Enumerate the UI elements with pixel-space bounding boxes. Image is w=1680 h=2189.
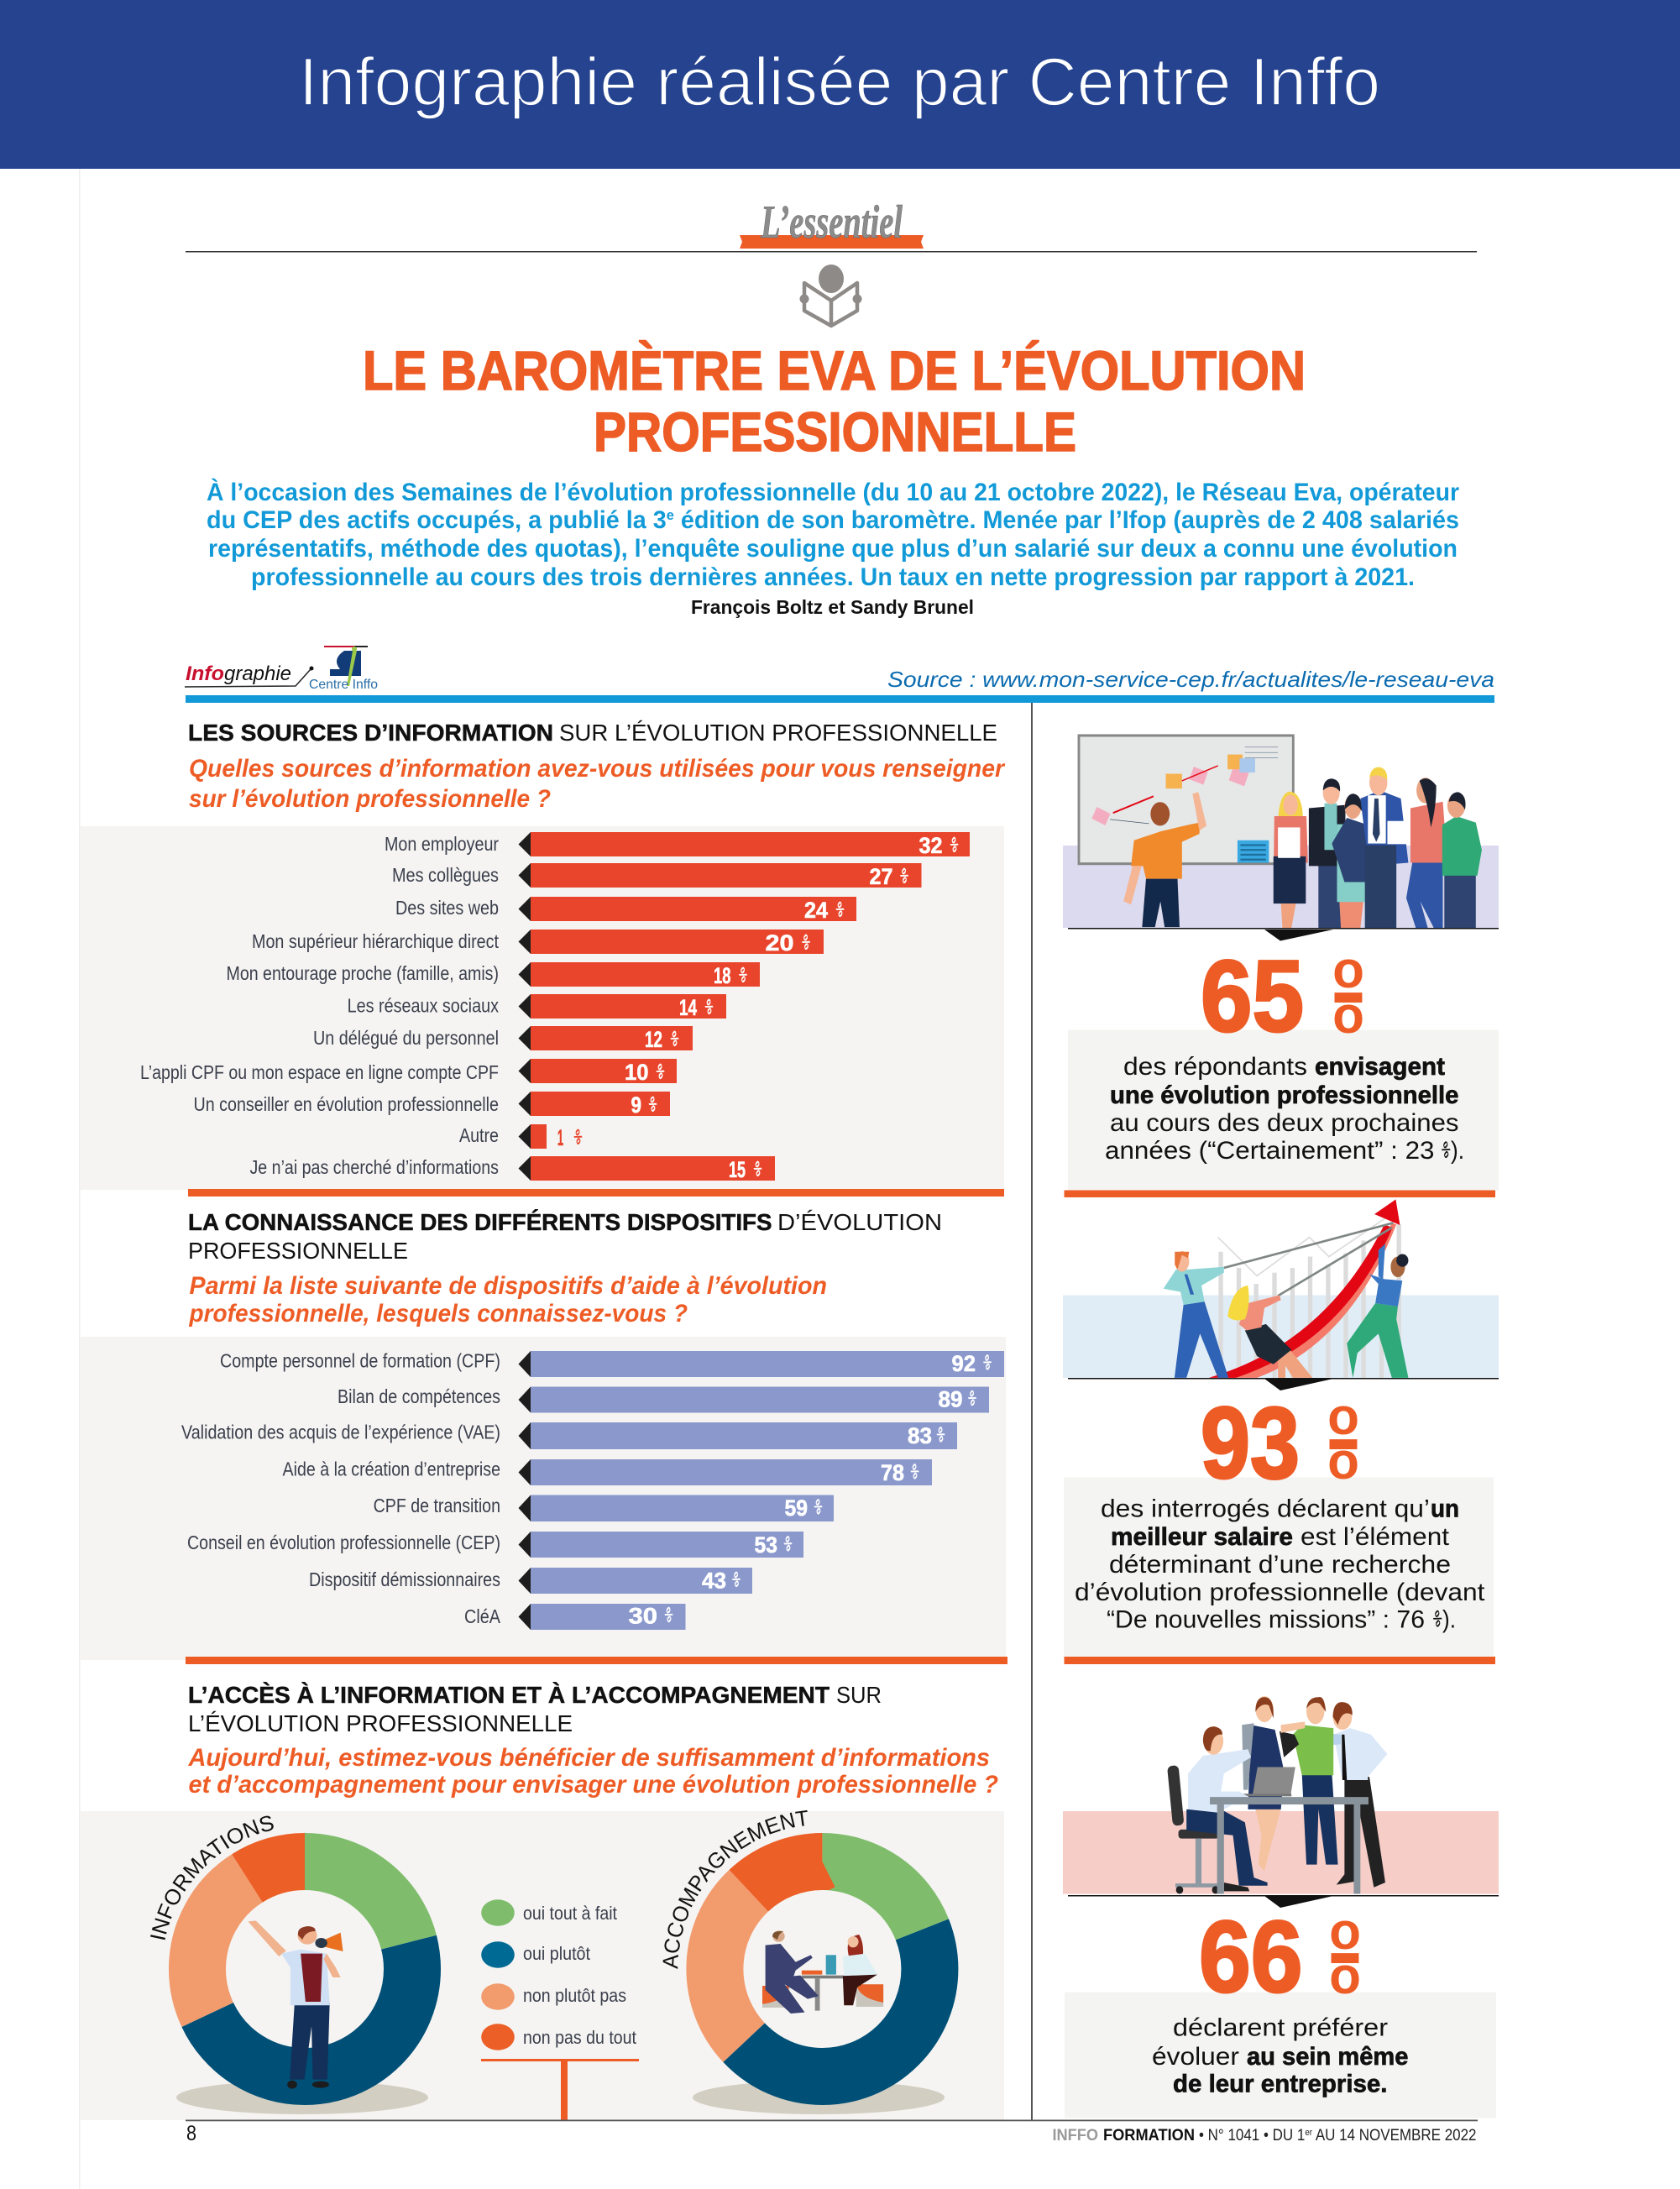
big number: 93%: – [1328, 1380, 1358, 1493]
bar: CEP: 53 [754, 1532, 777, 1558]
heading: accès: L’ÉVOLUTION PROFESSIONNELLE [188, 1710, 573, 1736]
heading: accès: SUR [836, 1682, 882, 1708]
heading: dispositifs: D’ÉVOLUTION [777, 1209, 942, 1235]
legend item: oui plutôt [481, 1941, 590, 1968]
question: dispositifs: Parmi la liste suivante de dispositifs d’aide à l’évolution [190, 1272, 827, 1300]
bar: Mon supérieur hiérarchique direct: Mon supérieur hiérarchique direct [252, 930, 500, 952]
footer: • N° 1041 • DU 1 [1199, 2127, 1317, 2144]
bar: Un délégué du personnel: Un délégué du personnel [313, 1027, 499, 1049]
illustration: team high five at a desk [1167, 1696, 1387, 1893]
intro text: e [667, 507, 674, 523]
question: accès: Aujourd’hui, estimez-vous bénéficier de suffisamment d’informations [188, 1744, 990, 1772]
stat text: 66%: évoluer [1152, 2043, 1239, 2071]
stat text: 65%: des répondants [1123, 1053, 1307, 1081]
bar: Dispositif démissionnaires: Dispositif démissionnaires [309, 1568, 500, 1590]
heading: sources: SUR L’ÉVOLUTION PROFESSIONNELLE [559, 720, 997, 746]
authors: François Boltz et Sandy Brunel [691, 596, 974, 618]
bar chart: sources [140, 832, 970, 1182]
footer: AU 14 NOVEMBRE 2022 [1312, 2127, 1476, 2144]
bar: CPF de transition [374, 1495, 834, 1521]
bar: Mes collègues: % [898, 866, 910, 887]
legend item: oui plutôt: oui plutôt [523, 1943, 590, 1964]
bar: CléA: 30 [628, 1604, 657, 1629]
bar: Aide à la création: % [908, 1461, 921, 1483]
stat panel: 65% [1063, 736, 1499, 1197]
bar: Mon employeur [385, 832, 970, 858]
bar: Mon employeur: 32 [919, 833, 942, 858]
heading: dispositifs: LA CONNAISSANCE DES DIFFÉRENTS DISPOSITIFS [188, 1209, 772, 1235]
bar: Un conseiller: % [646, 1094, 659, 1115]
intro text [207, 478, 1459, 591]
source: Source : www.mon-service-cep.fr/actualites/le-reseau-eva [887, 667, 1494, 692]
pointer [1264, 1379, 1333, 1390]
bar: Mes collègues: 27 [870, 864, 893, 889]
bar: Bilan de compétences: 89 [939, 1387, 962, 1412]
bar: Un délégué du personnel: % [667, 1029, 681, 1050]
big number: 65% [1201, 934, 1364, 1053]
footer: FORMATION [1103, 2127, 1195, 2144]
bar: Aide à la création: 78 [881, 1460, 904, 1485]
question: dispositifs [189, 1272, 827, 1328]
bar: Les réseaux sociaux [348, 994, 726, 1020]
stat text: 93%: déterminant d’une recherche [1109, 1551, 1451, 1579]
panel: sources d'information [80, 720, 1006, 1197]
stat text: 65%: % [1438, 1138, 1453, 1162]
illustration: team at a board [1079, 736, 1482, 928]
bar: CléA [464, 1604, 685, 1630]
big number: 93% [1201, 1380, 1359, 1500]
bar: CPF: 92 [952, 1351, 976, 1376]
bar: Mes collègues: Mes collègues [392, 864, 499, 886]
bar: Je n'ai pas cherché: % [751, 1159, 764, 1180]
question: accès: et d’accompagnement pour envisager une évolution professionnelle ? [188, 1771, 998, 1799]
stat text: 93%: % [1430, 1607, 1445, 1631]
bar: CPF de transition: % [811, 1496, 824, 1518]
footer: 8 [186, 2122, 196, 2145]
man 6 [1444, 874, 1476, 928]
bar: L'appli CPF: % [653, 1061, 667, 1082]
panel: connaissance des dispositifs [80, 1209, 1007, 1664]
heading: accès [188, 1682, 882, 1736]
bar chart: dispositifs [181, 1350, 1004, 1630]
illustration: two people at a table [762, 1930, 883, 2014]
bar: CEP: Conseil en évolution professionnelle (CEP) [187, 1532, 500, 1553]
heading: accès: L’ACCÈS À L’INFORMATION ET À L’ACCOMPAGNEMENT [188, 1682, 830, 1708]
intro text: édition de son baromètre. Menée par l’Ifop (auprès de 2 408 salariés [674, 506, 1459, 534]
section tag: L'essentiel: L’essentiel [760, 196, 903, 249]
stat text: 93%: un [1431, 1495, 1459, 1523]
intro text: À l’occasion des Semaines de l’évolution professionnelle (du 10 au 21 octobre 2022), le Réseau Eva, opérateur [207, 478, 1459, 506]
bar: VAE [181, 1421, 957, 1449]
bar: Mon supérieur hiérarchique direct: % [799, 932, 812, 953]
donut chart: accompagnement: ACCOMPAGNEMENT [663, 1810, 808, 1969]
big number: 66%: – [1330, 1894, 1360, 2007]
bar: Autre: % [571, 1127, 584, 1148]
legend item: oui tout à fait [481, 1899, 617, 1926]
title [363, 339, 1306, 463]
bar: Je n'ai pas cherché: Je n’ai pas cherché d’informations [250, 1156, 499, 1178]
bar: Dispositif démissionnaires: 43 [702, 1568, 726, 1594]
bar: CPF de transition: 59 [784, 1495, 808, 1521]
stat text: 66%: au sein même [1247, 2043, 1409, 2071]
stat panel: 66% [1063, 1696, 1499, 2118]
bar: Bilan de compétences: Bilan de compétences [338, 1385, 500, 1407]
heading: sources [188, 720, 997, 746]
bar: CPF [220, 1350, 1004, 1377]
footer [186, 2119, 1478, 2145]
intro text: professionnelle au cours des trois dernières années. Un taux en nette progression par rapport à 2021. [251, 563, 1415, 591]
bar: Les réseaux sociaux: 14 [679, 995, 697, 1020]
bar: Mon supérieur hiérarchique direct: 20 [766, 930, 794, 956]
top banner [0, 0, 1680, 169]
donut chart: accompagnement [663, 1810, 959, 2114]
bar: Aide à la création [282, 1458, 932, 1485]
heading: dispositifs [188, 1209, 942, 1264]
stat panel: 93% [1063, 1199, 1499, 1664]
bar: Des sites web [395, 897, 856, 923]
bar: Mon entourage proche: Mon entourage proche (famille, amis) [227, 962, 499, 984]
bar: Des sites web: 24 [804, 898, 828, 923]
stat text: 93% [1075, 1495, 1485, 1634]
bar: VAE: % [934, 1424, 947, 1446]
title: PROFESSIONNELLE [594, 401, 1076, 463]
stat text: 93%: ). [1442, 1606, 1456, 1634]
intro text: du CEP des actifs occupés, a publié la 3 [207, 506, 686, 534]
stat text: 93%: des interrogés déclarent qu’ [1101, 1495, 1430, 1523]
stat text: 65%: ). [1451, 1137, 1464, 1165]
bar: Mon entourage proche: 18 [714, 963, 730, 988]
bar: CléA: CléA [464, 1605, 501, 1627]
bar: Autre [459, 1124, 584, 1150]
big number: 93%: o [1327, 1388, 1359, 1446]
footer: INFFO [1053, 2127, 1098, 2144]
logo: Infographie Centre Inffo: Centre Inffo [309, 678, 378, 692]
stat text: 65%: envisagent [1315, 1053, 1445, 1081]
logo: Infographie Centre Inffo [185, 646, 378, 692]
bar: Un délégué du personnel [313, 1026, 693, 1052]
legend item: oui tout à fait: oui tout à fait [523, 1903, 617, 1924]
bar: CPF: Compte personnel de formation (CPF) [220, 1350, 500, 1372]
pointer [1264, 930, 1333, 940]
legend item: non pas du tout [481, 2024, 636, 2050]
woman 3 [1339, 901, 1363, 928]
question: dispositifs: professionnelle, lesquels connaissez-vous ? [189, 1300, 688, 1328]
bar: Mon employeur: % [947, 835, 960, 856]
bar: CPF: % [981, 1352, 993, 1374]
heading: dispositifs: PROFESSIONNELLE [188, 1238, 408, 1264]
bar: CléA: % [662, 1605, 675, 1626]
bar: Un conseiller [193, 1092, 670, 1118]
logo: Infographie Centre Inffo: Info [186, 662, 224, 685]
bar: Des sites web: Des sites web [395, 897, 499, 919]
bar: Mes collègues [392, 863, 922, 889]
bar: L'appli CPF [140, 1059, 677, 1085]
section tag: L'essentiel [186, 196, 1477, 252]
illustration: pulling the rising arrow [1164, 1199, 1408, 1378]
stat text: 66%: de leur entreprise. [1173, 2071, 1387, 2098]
stat text: 66% [1152, 2014, 1409, 2098]
stat text: 93%: meilleur salaire [1111, 1523, 1293, 1551]
question: accès [188, 1744, 998, 1799]
bar: CPF de transition: CPF de transition [374, 1495, 500, 1516]
logo: Infographie Centre Inffo: graphie [224, 662, 291, 685]
bar: Je n'ai pas cherché: 15 [729, 1157, 746, 1182]
bar: L'appli CPF: L’appli CPF ou mon espace en ligne compte CPF [140, 1061, 499, 1083]
legend [481, 1899, 639, 2120]
title: LE BAROMÈTRE EVA DE L’ÉVOLUTION [363, 339, 1306, 401]
bar: Autre: 1 [557, 1125, 563, 1150]
bar: Des sites web: % [833, 899, 846, 920]
bar: Les réseaux sociaux: % [702, 997, 715, 1018]
big number: 66%: 66 [1199, 1899, 1303, 2014]
bar: CEP [187, 1532, 803, 1558]
stat text: 93%: “De nouvelles missions” : 76 [1107, 1606, 1425, 1634]
bar: Mon supérieur hiérarchique direct [252, 930, 824, 956]
bar: Mon entourage proche [227, 962, 760, 988]
stat text: 93%: d’évolution professionnelle (devant [1075, 1579, 1485, 1606]
bar: Mon employeur: Mon employeur [385, 833, 499, 855]
big number: 66% [1199, 1894, 1361, 2014]
bar: Autre: Autre [459, 1124, 499, 1146]
icon: reader with open book [799, 264, 861, 326]
big number: 66%: o [1329, 1947, 1361, 2005]
stat text: 93%: est l’élément [1301, 1523, 1450, 1551]
stat text: 65%: au cours des deux prochaines [1110, 1109, 1459, 1137]
intro text: représentatifs, méthode des quotas), l’enquête souligne que plus d’un salarié sur deux a connu une évolution [208, 535, 1458, 563]
illustration: man with megaphone [248, 1920, 343, 2089]
legend item: non plutôt pas: non plutôt pas [523, 1985, 626, 2006]
bar: Bilan de compétences: % [966, 1388, 978, 1410]
bar: Un délégué du personnel: 12 [645, 1027, 662, 1052]
big number: 93%: 93 [1201, 1385, 1300, 1500]
bar: CEP: % [781, 1533, 794, 1555]
question: sources [189, 755, 1006, 813]
stat text: 65%: années (“Certainement” : 23 [1105, 1137, 1434, 1165]
bar: Bilan de compétences [338, 1385, 989, 1412]
legend item: non plutôt pas [481, 1983, 626, 2010]
question: sources: Quelles sources d’information avez-vous utilisées pour vous renseigner [189, 755, 1006, 783]
big number: 93%: o [1327, 1432, 1359, 1490]
bar: VAE: 83 [908, 1423, 932, 1448]
stat text: 65%: une évolution professionnelle [1110, 1081, 1459, 1109]
top banner: Infographie réalisée par Centre Inffo [299, 45, 1380, 120]
legend item: non pas du tout: non pas du tout [523, 2027, 636, 2048]
bar: Un conseiller: 9 [631, 1092, 641, 1118]
blue rule [186, 695, 1494, 703]
big number: 65%: – [1333, 934, 1363, 1046]
man 4 [1360, 790, 1408, 864]
donut chart: informations: INFORMATIONS [150, 1815, 274, 1940]
question: sources: sur l’évolution professionnelle ? [189, 785, 551, 813]
bar: Dispositif démissionnaires: % [730, 1569, 742, 1590]
bar: Je n'ai pas cherché [250, 1156, 775, 1182]
bar: VAE: Validation des acquis de l’expérience (VAE) [181, 1421, 500, 1443]
woman 5 [1406, 860, 1443, 928]
pointer [1264, 1896, 1333, 1908]
heading: sources: LES SOURCES D’INFORMATION [188, 720, 553, 746]
stat text: 66%: déclarent préférer [1173, 2014, 1388, 2042]
man 2 [1318, 853, 1341, 928]
bar: Aide à la création: Aide à la création d’entreprise [282, 1458, 500, 1479]
woman 1 [1278, 792, 1303, 837]
bar: Les réseaux sociaux: Les réseaux sociaux [348, 994, 499, 1016]
big number: 66%: o [1329, 1903, 1361, 1961]
bar: Un conseiller: Un conseiller en évolution professionnelle [193, 1093, 499, 1115]
bar: Mon entourage proche: % [736, 965, 749, 986]
panel: accès à l'information [81, 1682, 1004, 2120]
stat text: 65% [1105, 1053, 1464, 1165]
big number: 65%: o [1332, 941, 1364, 999]
big number: 65%: o [1332, 987, 1364, 1045]
donut chart: informations [150, 1815, 441, 2114]
bar: Dispositif démissionnaires [309, 1568, 752, 1594]
bar: L'appli CPF: 10 [625, 1060, 648, 1085]
footer: er [1305, 2128, 1312, 2138]
big number: 65%: 65 [1201, 939, 1304, 1053]
